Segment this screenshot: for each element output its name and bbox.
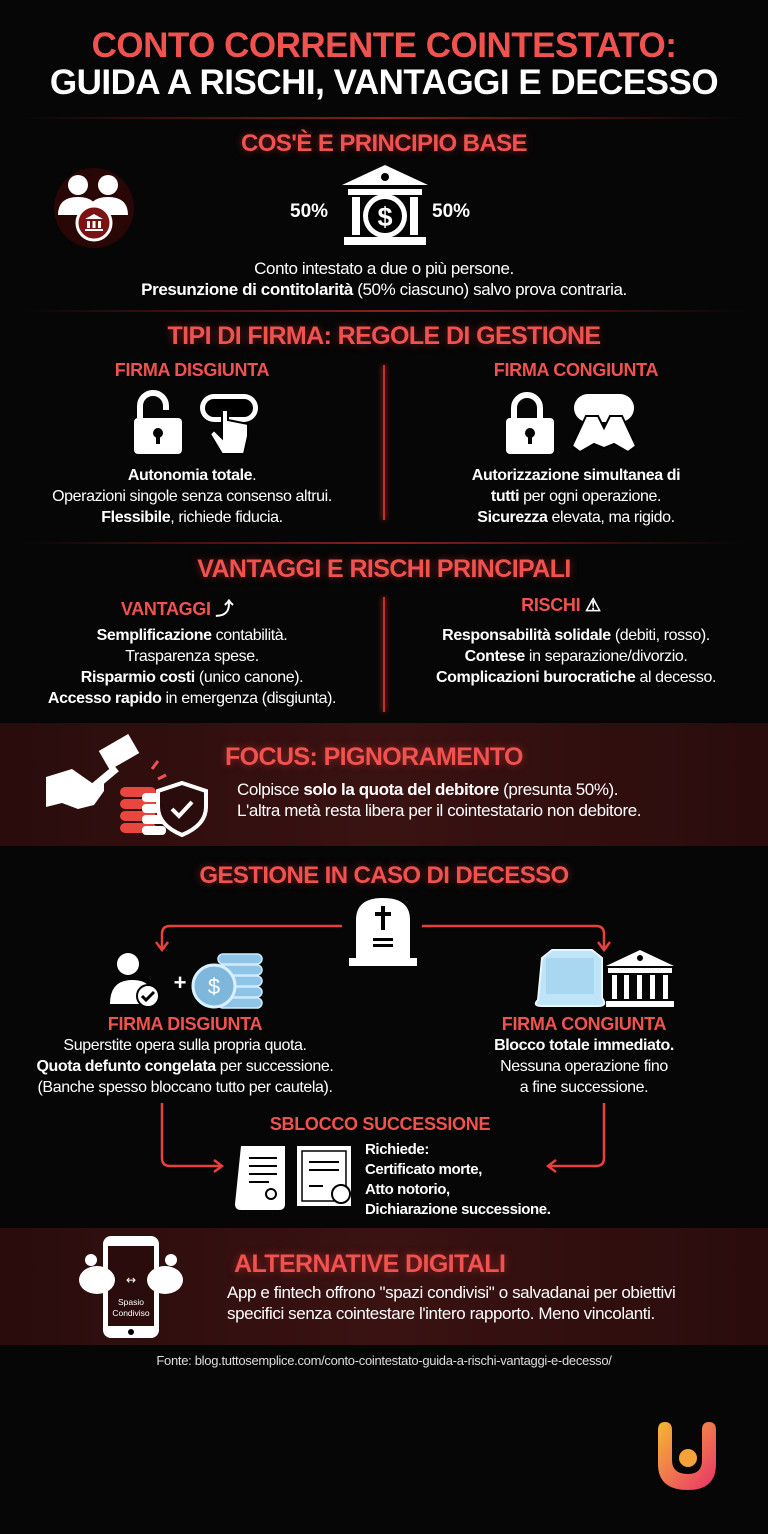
panel: rischi: Complicazioni burocratiche al decesso. [436, 669, 716, 686]
icon: lock and hands [506, 392, 635, 454]
icon: person + coins [110, 953, 263, 1009]
panel: firma disgiunta decesso [37, 953, 333, 1096]
panel: firma congiunta decesso: FIRMA CONGIUNTA [502, 1014, 666, 1034]
panel: firma congiunta: FIRMA CONGIUNTA [494, 360, 658, 380]
panel: firma disgiunta decesso: Quota defunto congelata per successione. [37, 1058, 333, 1075]
icon: open lock and hand [134, 390, 258, 454]
panel: sblocco successione: Certificato morte, [365, 1161, 482, 1178]
icon: person + coins: + [174, 970, 186, 995]
panel: firma congiunta: Sicurezza elevata, ma rigido. [477, 509, 675, 526]
text: Conto intestato a due o più persone. [254, 259, 514, 278]
panel: firma congiunta decesso: a fine successione. [520, 1079, 648, 1096]
panel: sblocco successione: Dichiarazione successione. [365, 1201, 551, 1218]
text [227, 1283, 675, 1323]
text: L'altra metà resta libera per il cointestatario non debitore. [237, 801, 641, 820]
text: Colpisce solo la quota del debitore (presunta 50%). [237, 780, 618, 799]
title: GUIDA A RISCHI, VANTAGGI E DECESSO [50, 63, 718, 102]
heading: VANTAGGI E RISCHI PRINCIPALI [197, 555, 571, 583]
panel: rischi: Responsabilità solidale (debiti, rosso). [442, 627, 710, 644]
panel: firma disgiunta: Autonomia totale. [128, 467, 256, 484]
panel: sblocco successione: Richiede: [365, 1141, 429, 1158]
text: App e fintech offrono "spazi condivisi" o salvadanai per obiettivi [227, 1283, 675, 1302]
section: tipi di firma [52, 322, 680, 526]
heading: COS'È E PRINCIPIO BASE [241, 130, 527, 157]
icon: phone with piggy banks [79, 1236, 183, 1338]
panel: firma disgiunta: Flessibile, richiede fiducia. [101, 509, 283, 526]
icon: gavel and coins [46, 734, 208, 838]
icon: bank 50/50: 50% [432, 201, 470, 222]
panel: rischi: Contese in separazione/divorzio. [465, 648, 687, 665]
icon: people with bank [54, 168, 134, 248]
title: CONTO CORRENTE COINTESTATO: [92, 26, 676, 65]
icon: bank 50/50: $ [377, 202, 393, 232]
source: Fonte: blog.tuttosemplice.com/conto-cointestato-guida-a-rischi-vantaggi-e-decesso/ [156, 1353, 612, 1368]
text [141, 259, 627, 299]
panel: firma disgiunta decesso: FIRMA DISGIUNTA [108, 1014, 262, 1034]
heading: TIPI DI FIRMA: REGOLE DI GESTIONE [168, 322, 600, 350]
panel: sblocco successione: Atto notorio, [365, 1181, 450, 1198]
panel: rischi: RISCHI ⚠ [521, 595, 601, 615]
panel: alternative digitali [0, 1228, 768, 1345]
icon: documents [235, 1146, 351, 1210]
panel: firma congiunta: tutti per ogni operazione. [491, 488, 661, 505]
heading: GESTIONE IN CASO DI DECESSO [199, 862, 569, 889]
title [50, 26, 718, 102]
icon: phone with piggy banks: ↔ [126, 1273, 136, 1287]
panel: firma congiunta: Autorizzazione simultanea di [472, 467, 680, 484]
panel: firma congiunta decesso [494, 949, 674, 1096]
icon: bank 50/50: 50% [290, 201, 328, 222]
arrows: flow [155, 924, 611, 1173]
panel: focus pignoramento [0, 723, 768, 846]
logo [658, 1422, 716, 1490]
icon: tombstone [349, 898, 417, 966]
panel: firma disgiunta: Operazioni singole senza consenso altrui. [52, 488, 332, 505]
text: Presunzione di contitolarità (50% ciascuno) salvo prova contraria. [141, 280, 627, 299]
icon: ice cube and bank [534, 949, 674, 1007]
text: specifici senza cointestare l'intero rapporto. Meno vincolanti. [227, 1304, 655, 1323]
text [237, 780, 641, 820]
heading: FOCUS: PIGNORAMENTO [225, 743, 523, 771]
panel: vantaggi: VANTAGGI ⤴ [121, 599, 233, 619]
panel: vantaggi [48, 598, 336, 707]
panel: firma disgiunta: FIRMA DISGIUNTA [115, 360, 269, 380]
panel: firma congiunta [472, 360, 680, 526]
panel: vantaggi: Risparmio costi (unico canone). [81, 669, 303, 686]
icon: phone with piggy banks: Condiviso [112, 1308, 150, 1318]
heading: ALTERNATIVE DIGITALI [234, 1250, 505, 1278]
panel: sblocco successione [235, 1114, 551, 1218]
panel: firma disgiunta [52, 360, 332, 526]
panel: vantaggi: Semplificazione contabilità. [97, 627, 287, 644]
icon: phone with piggy banks: Spasio [118, 1297, 144, 1307]
panel: firma congiunta decesso: Nessuna operazione fino [500, 1058, 668, 1075]
icon: person + coins: $ [208, 974, 220, 999]
panel: rischi [436, 595, 716, 686]
section: vantaggi e rischi [48, 554, 716, 715]
panel: firma disgiunta decesso: Superstite opera sulla propria quota. [63, 1037, 307, 1054]
section: cos'è [54, 127, 627, 299]
panel: firma disgiunta decesso: (Banche spesso bloccano tutto per cautela). [38, 1079, 332, 1096]
panel: firma congiunta decesso: Blocco totale immediato. [494, 1037, 674, 1054]
panel: sblocco successione: SBLOCCO SUCCESSIONE [270, 1114, 490, 1134]
panel: vantaggi: Accesso rapido in emergenza (disgiunta). [48, 690, 336, 707]
panel: vantaggi: Trasparenza spese. [125, 648, 259, 665]
icon: bank 50/50 [290, 165, 470, 245]
section: decesso [37, 862, 674, 1218]
